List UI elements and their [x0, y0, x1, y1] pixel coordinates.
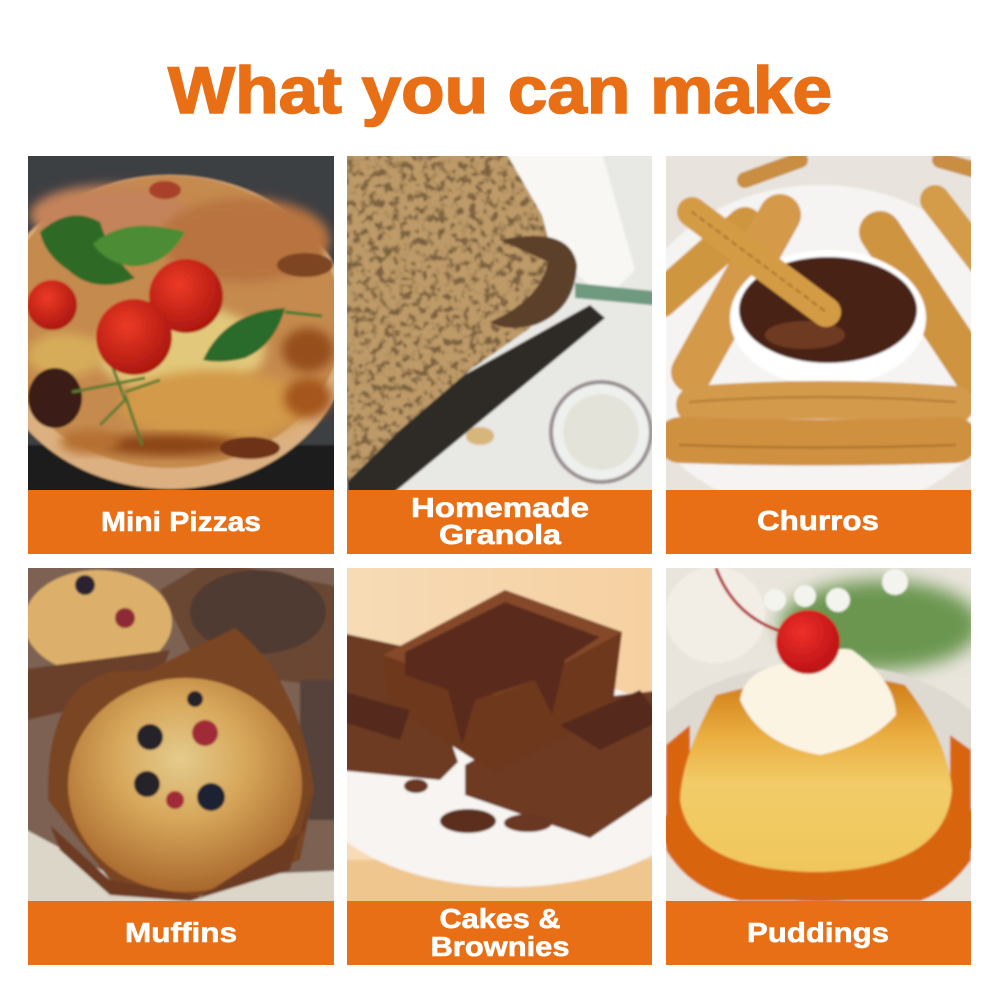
panel: mini pizzas	[28, 156, 334, 554]
label bar: Cakes & Brownies: Cakes &	[440, 903, 560, 934]
label bar: Mini Pizzas: Mini Pizzas	[101, 506, 261, 537]
label bar: Puddings: Puddings	[747, 917, 889, 948]
panel: homemade granola	[347, 156, 652, 554]
label bar: Homemade Granola	[347, 490, 652, 554]
photo: chocolate brownies	[347, 568, 652, 901]
label bar: Puddings	[666, 901, 971, 965]
label bar: Churros: Churros	[757, 505, 879, 536]
basil leaves	[40, 215, 135, 285]
panel: muffins	[28, 568, 334, 965]
photo: granola tray	[347, 156, 652, 490]
panel: cakes and brownies	[347, 568, 652, 965]
photo: blueberry muffins	[28, 568, 334, 901]
photo: churros with chocolate	[666, 156, 971, 490]
label bar: Cakes & Brownies	[347, 901, 652, 965]
photo: caramel pudding	[666, 568, 971, 901]
photo: mini pizza	[28, 156, 334, 490]
tomatoes	[27, 280, 77, 330]
label bar: Cakes & Brownies: Brownies	[430, 931, 570, 962]
label bar: Muffins: Muffins	[125, 917, 237, 948]
label bar: Mini Pizzas	[28, 490, 334, 554]
panel: churros	[666, 156, 971, 554]
label bar: Churros	[666, 490, 971, 554]
label bar: Muffins	[28, 901, 334, 965]
label bar: Homemade Granola: Homemade	[411, 492, 589, 523]
panel: puddings	[666, 568, 971, 965]
title: What you can make	[168, 53, 832, 127]
label bar: Homemade Granola: Granola	[439, 519, 561, 550]
